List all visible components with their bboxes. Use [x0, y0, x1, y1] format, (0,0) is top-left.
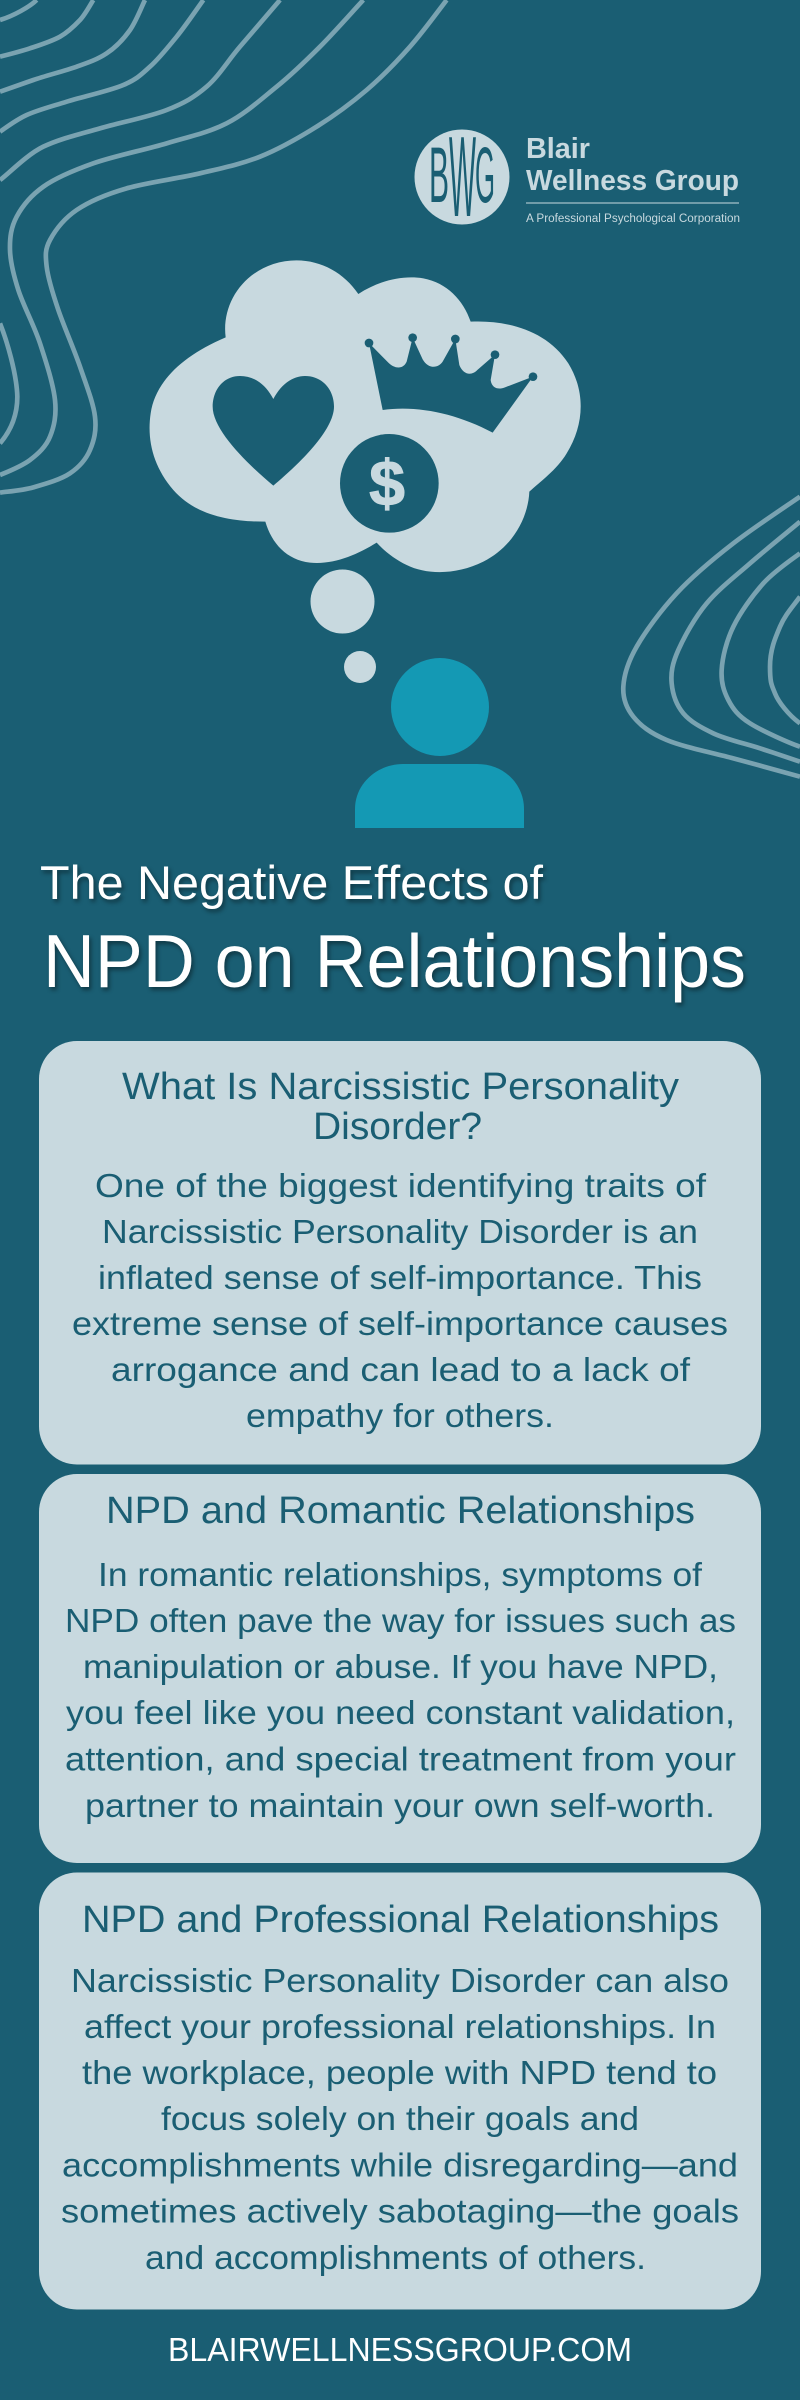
logo name line 1: Blair: [526, 133, 590, 165]
logo name line 2: Wellness Group: [526, 165, 739, 197]
icon: heart: [213, 376, 334, 486]
heading: NPD and Professional Relationships: [82, 1899, 719, 1941]
panel background: [39, 1474, 761, 1863]
body text: sometimes actively sabotaging—the goals: [61, 2193, 739, 2230]
thought bubble large: [310, 570, 374, 634]
panel: professional relationships: [39, 1872, 761, 2310]
wave lines right: [623, 497, 800, 777]
icon: crown: [365, 333, 537, 433]
icon: coin circle: [340, 434, 439, 533]
body text: arrogance and can lead to a lack of: [111, 1351, 691, 1388]
body text: and accomplishments of others.: [145, 2239, 646, 2276]
body text: attention, and special treatment from your: [65, 1740, 736, 1778]
logo tagline: A Professional Psychological Corporation: [526, 213, 740, 225]
heading continued: Disorder?: [313, 1106, 482, 1148]
title line 1: The Negative Effects of: [40, 856, 544, 909]
body text: partner to maintain your own self-worth.: [85, 1787, 715, 1824]
thought cloud: [150, 260, 581, 572]
body text: the workplace, people with NPD tend to: [82, 2054, 717, 2091]
body text: One of the biggest identifying traits of: [95, 1167, 707, 1204]
logo monogram: G: [475, 131, 495, 220]
panel: romantic relationships: [39, 1474, 761, 1863]
logo monogram: W: [449, 113, 476, 241]
panel background: [39, 1872, 761, 2310]
thought cloud illustration: [150, 260, 581, 572]
body text: inflated sense of self-importance. This: [98, 1259, 702, 1296]
icon: person: [355, 658, 524, 828]
icon: dollar sign: $: [369, 447, 405, 519]
thought bubble small: [344, 651, 376, 683]
heading: What Is Narcissistic Personality: [122, 1066, 679, 1108]
body text: [61, 1962, 739, 2276]
logo monogram: B: [429, 131, 449, 220]
body text: [72, 1167, 728, 1434]
body text: In romantic relationships, symptoms of: [98, 1556, 703, 1593]
body text: you feel like you need constant validation,: [66, 1694, 735, 1731]
logo: [414, 113, 740, 241]
panel: what is NPD: [39, 1041, 761, 1464]
body text: empathy for others.: [246, 1397, 554, 1434]
body text: focus solely on their goals and: [161, 2100, 639, 2137]
panel background: [39, 1041, 761, 1464]
body text: accomplishments while disregarding—and: [62, 2146, 738, 2184]
wave lines top left: [0, 0, 447, 493]
body text: Narcissistic Personality Disorder can also: [71, 1962, 729, 1999]
heading: NPD and Romantic Relationships: [106, 1490, 695, 1532]
title: [40, 856, 746, 1003]
logo monogram: [429, 113, 495, 241]
body text: NPD often pave the way for issues such as: [65, 1602, 736, 1639]
body text: extreme sense of self-importance causes: [72, 1305, 728, 1342]
body text: [65, 1556, 736, 1824]
logo emblem: [414, 130, 510, 224]
title line 2: NPD on Relationships: [43, 919, 746, 1003]
body text: Narcissistic Personality Disorder is an: [102, 1213, 698, 1250]
body text: affect your professional relationships. In: [84, 2008, 716, 2045]
footer website: BLAIRWELLNESSGROUP.COM: [168, 2331, 632, 2368]
body text: manipulation or abuse. If you have NPD,: [83, 1648, 718, 1685]
